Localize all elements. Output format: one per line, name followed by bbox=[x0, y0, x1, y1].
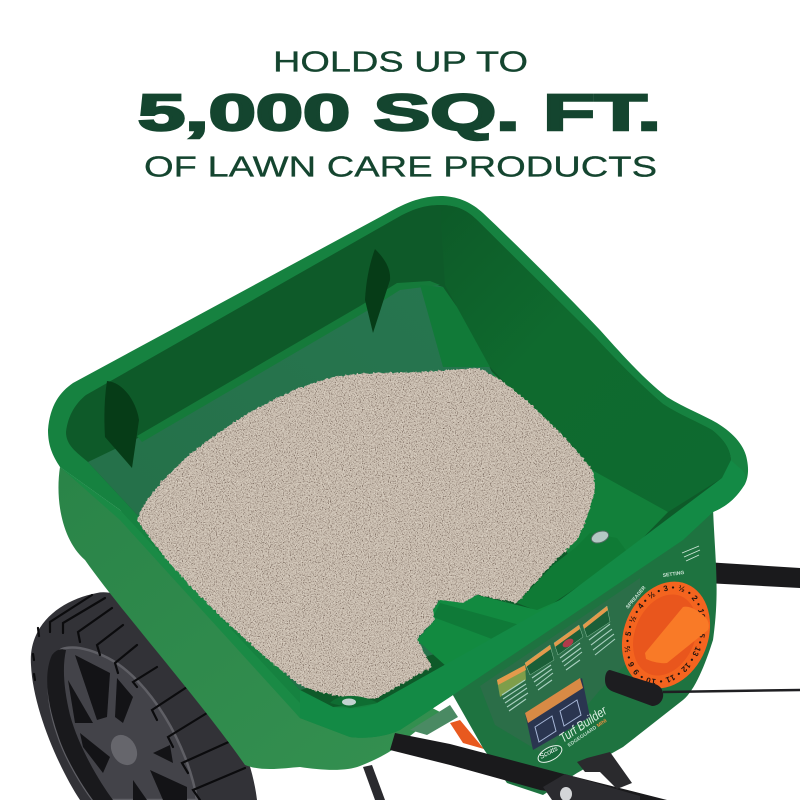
spreader label: SPREADER bbox=[625, 585, 648, 610]
right push bar bbox=[705, 562, 800, 588]
warning note bbox=[682, 546, 700, 561]
bottom bolt mount bbox=[330, 696, 378, 708]
dial knob bbox=[645, 607, 709, 663]
bracket ridge bbox=[433, 603, 520, 642]
rim lower lip shade bbox=[60, 467, 350, 737]
top bolt mount bbox=[517, 533, 628, 612]
product sub-name: EDGEGUARD MINI bbox=[567, 718, 609, 749]
rod below hopper bbox=[363, 765, 385, 800]
wheel bbox=[31, 592, 257, 800]
hopper lower body bbox=[58, 467, 440, 770]
rim recess bbox=[47, 649, 113, 800]
step card 4 bbox=[583, 606, 610, 637]
bottom bolt head bbox=[342, 698, 356, 706]
lower push handle bbox=[390, 733, 667, 800]
hopper floor bbox=[88, 283, 540, 690]
step card 3 bbox=[554, 625, 583, 655]
dial outer ring bbox=[606, 568, 726, 702]
right divider tab bbox=[365, 249, 390, 333]
scotts logo: Scotts bbox=[539, 745, 560, 761]
right floor channel bbox=[420, 285, 490, 367]
step captions bbox=[502, 624, 615, 711]
control cable bbox=[663, 690, 800, 692]
heading line: of lawn care products: OF LAWN CARE PRODUCTS bbox=[144, 152, 657, 184]
left divider tab bbox=[104, 381, 139, 468]
dial numbers: 6 • ½ • 5 • ½ • 4 • ½ • 3 • ½ • 2 • 16 • 15 • 13 • 12 • 11 • 10 • 9 bbox=[624, 585, 706, 684]
scotts logo bbox=[535, 742, 565, 766]
cable holder bbox=[605, 670, 663, 706]
control panel bbox=[450, 508, 717, 795]
step card 1 bbox=[497, 665, 526, 697]
setting dial bbox=[622, 582, 710, 688]
hopper bbox=[48, 196, 748, 795]
wheel face bbox=[49, 647, 197, 800]
headline bbox=[138, 46, 661, 184]
front linkage shadow bbox=[410, 705, 458, 735]
back floor highlight bbox=[137, 281, 440, 442]
front rim band bbox=[300, 460, 746, 738]
orange linkage bbox=[450, 720, 484, 749]
panel instructions bbox=[497, 546, 700, 766]
tyre bbox=[31, 592, 257, 800]
panel label area bbox=[480, 578, 640, 755]
wheel windows bbox=[68, 655, 187, 800]
hopper cavity: back and side walls bbox=[66, 205, 731, 707]
step card 2 bbox=[525, 645, 554, 675]
spreader setting box bbox=[525, 678, 590, 750]
setting label: SETTING bbox=[662, 570, 685, 579]
dial inner disk bbox=[621, 585, 709, 685]
green internal bracket bbox=[417, 595, 560, 687]
brand name: Turf Builder bbox=[556, 703, 610, 745]
hopper rim bbox=[48, 196, 748, 738]
handle clip bbox=[577, 752, 632, 789]
handle joint bbox=[543, 774, 640, 800]
lower right floor ledge bbox=[480, 360, 668, 570]
wheel hub bbox=[111, 735, 137, 765]
fertilizer granules bbox=[137, 368, 595, 699]
heading line: 5,000 sq. ft.: 5,000 SQ. FT. bbox=[138, 84, 661, 141]
top bolt bbox=[590, 529, 610, 545]
tyre tread grooves bbox=[33, 595, 245, 800]
heading line: holds up to: HOLDS UP TO bbox=[273, 46, 528, 78]
right inner wall bbox=[440, 205, 731, 512]
handle bolt bbox=[560, 787, 572, 800]
